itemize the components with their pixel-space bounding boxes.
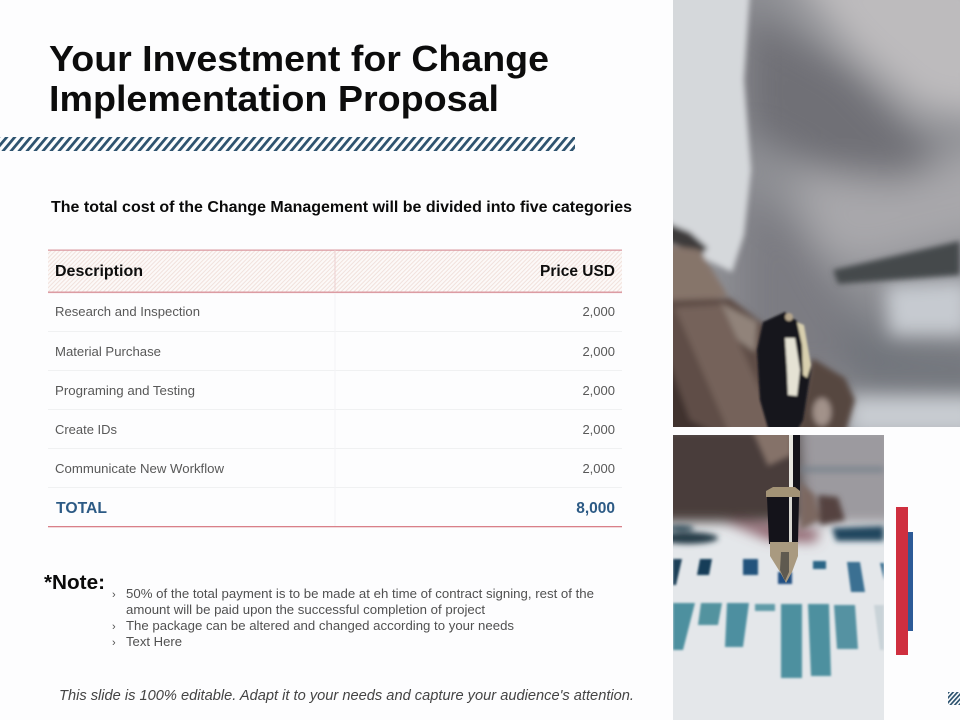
note list: › [112, 589, 116, 601]
note list: › [112, 637, 116, 649]
note list: › [112, 621, 116, 633]
note list: The package can be altered and changed according to your needs [126, 618, 515, 633]
table header [48, 250, 622, 293]
total row: 8,000 [576, 500, 615, 517]
chart bars [673, 559, 884, 678]
note label: *Note: [44, 572, 105, 594]
pen barrel and nib [766, 435, 800, 583]
title: Your Investment for Change [49, 38, 549, 79]
table rows: Create IDs [55, 422, 117, 437]
accent bars [896, 507, 913, 655]
table header: Price USD [540, 263, 615, 280]
table rows [48, 293, 622, 526]
note list [112, 586, 594, 649]
title [49, 38, 549, 119]
footer note: This slide is 100% editable. Adapt it to your needs and capture your audience's attention. [59, 687, 634, 704]
table rows: Communicate New Workflow [55, 461, 225, 476]
table rows: 2,000 [582, 304, 615, 319]
striped divider [0, 137, 575, 151]
table rows: Research and Inspection [55, 304, 200, 319]
total row [48, 500, 622, 527]
table rows: 2,000 [582, 383, 615, 398]
table rows: 2,000 [582, 344, 615, 359]
photo: hand holding pen, upper [665, 0, 960, 436]
table header: Description [55, 263, 143, 280]
table rows: 2,000 [582, 461, 615, 476]
corner stripes [948, 692, 960, 705]
pricing table [48, 250, 622, 527]
table rows: Material Purchase [55, 344, 161, 359]
title: Implementation Proposal [49, 78, 499, 119]
note list: amount will be paid upon the successful completion of project [126, 602, 485, 617]
note list: 50% of the total payment is to be made at eh time of contract signing, rest of the [126, 586, 594, 601]
photo: pen nib on chart, lower [673, 435, 884, 720]
total row: TOTAL [56, 500, 107, 517]
table rows: Programing and Testing [55, 383, 195, 398]
note list: Text Here [126, 634, 182, 649]
subtitle: The total cost of the Change Management will be divided into five categories [51, 199, 632, 216]
table rows: 2,000 [582, 422, 615, 437]
